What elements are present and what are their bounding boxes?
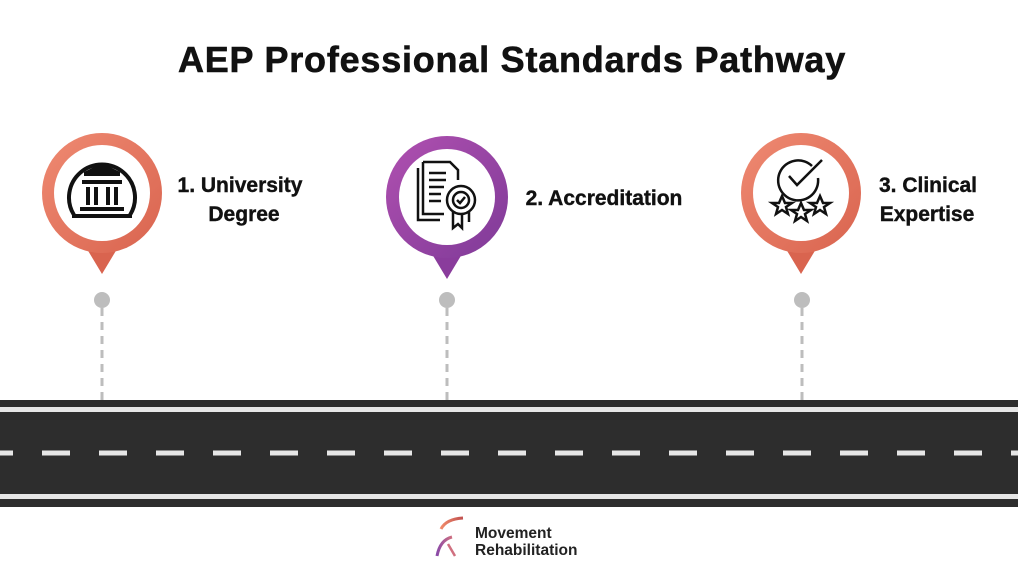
pin 2: accreditation (386, 136, 508, 279)
title: AEP Professional Standards Pathway (178, 39, 846, 80)
icon: certificate (418, 162, 475, 228)
road (0, 400, 1018, 507)
label 3: Expertise (880, 203, 974, 226)
pin 1: university (42, 133, 162, 274)
connector 1 (94, 292, 110, 400)
label 2: 2. Accreditation (526, 187, 682, 210)
label 1: Degree (208, 203, 280, 226)
connector 3 (794, 292, 810, 400)
icon: university building (69, 163, 135, 218)
label 1: 1. University (178, 174, 303, 197)
connector 2 (439, 292, 455, 400)
icon: check and stars (772, 160, 830, 221)
logo: Rehabilitation (475, 542, 577, 559)
logo: Movement (475, 525, 552, 542)
label 3: 3. Clinical (879, 174, 977, 197)
pin 3: clinical expertise (741, 133, 861, 274)
logo (437, 518, 577, 559)
